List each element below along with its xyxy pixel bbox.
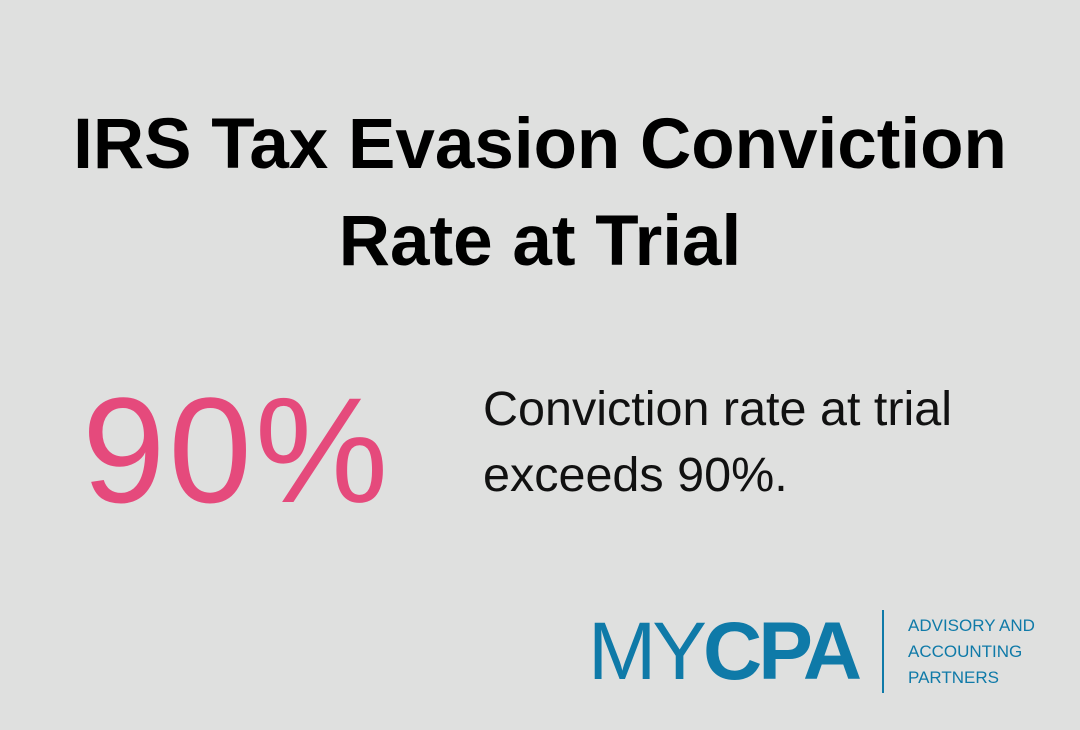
logo tagline: ADVISORY AND <box>908 616 1035 635</box>
stat description: exceeds 90%. <box>483 448 788 502</box>
title <box>73 105 1007 281</box>
stat description: Conviction rate at trial <box>483 382 952 436</box>
logo tagline <box>882 610 1035 693</box>
logo tagline: PARTNERS <box>908 668 999 687</box>
logo <box>588 606 1035 697</box>
logo wordmark: MYCPA <box>588 606 858 697</box>
title: Rate at Trial <box>339 202 741 281</box>
big stat: 90%: 90% <box>82 366 391 534</box>
logo tagline: ACCOUNTING <box>908 642 1022 661</box>
title: IRS Tax Evasion Conviction <box>73 105 1007 184</box>
stat description <box>483 382 952 502</box>
